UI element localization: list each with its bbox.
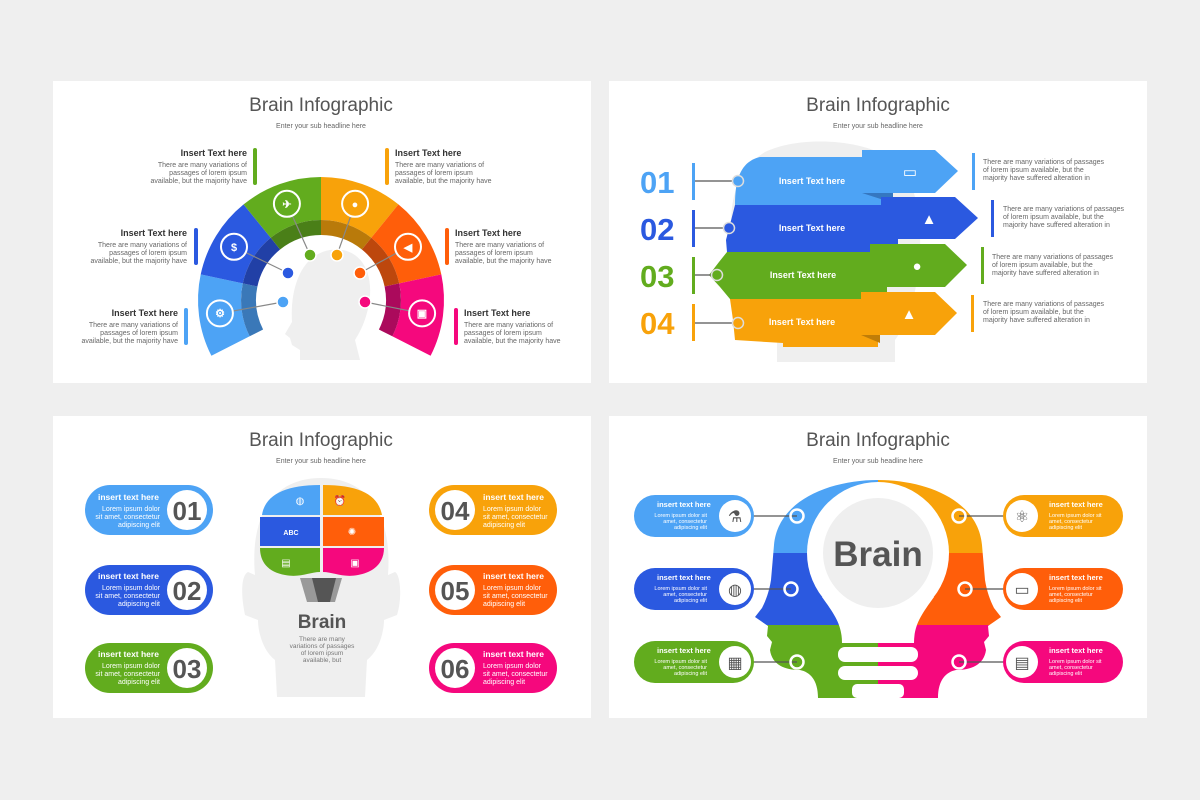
pills: insert text here — [483, 571, 544, 581]
right texts: majority have suffered alteration in — [1003, 222, 1110, 229]
numbers — [640, 165, 675, 341]
right texts: There are many variations of passages — [992, 254, 1114, 261]
pills — [634, 495, 1123, 683]
pills: ⚛ — [1015, 509, 1029, 526]
text blocks: passages of lorem ipsum — [464, 330, 542, 337]
right texts: There are many variations of passages — [983, 301, 1105, 308]
brain: ◍ — [296, 496, 305, 507]
pills: adipiscing elit — [674, 598, 707, 604]
brain label: Brain — [833, 535, 923, 574]
pills: insert text here — [483, 492, 544, 502]
pills: amet, consectetur — [1049, 592, 1093, 598]
pills: Lorem ipsum dolor — [483, 663, 542, 670]
pills: 01 — [173, 496, 201, 526]
brain description: There are many — [299, 636, 346, 643]
band labels: Insert Text here — [769, 317, 835, 327]
panel: head bands — [609, 81, 1147, 383]
right head — [878, 480, 1001, 698]
pills: Lorem ipsum dolor — [102, 663, 161, 670]
text blocks: Insert Text here — [181, 148, 247, 158]
pills: sit amet, consectetur — [483, 593, 548, 600]
pills: 05 — [441, 576, 469, 606]
right texts: of lorem ipsum available, but the — [983, 309, 1084, 316]
text blocks — [82, 148, 561, 345]
arrow tags — [861, 150, 978, 343]
pills: Lorem ipsum dolor sit — [1049, 586, 1102, 592]
pills: insert text here — [1049, 500, 1103, 509]
pills: amet, consectetur — [663, 592, 707, 598]
panel: brain grid — [53, 416, 591, 718]
pills: adipiscing elit — [674, 671, 707, 677]
connectors — [692, 163, 744, 341]
pills: Lorem ipsum dolor sit — [654, 586, 707, 592]
head silhouette — [720, 141, 920, 362]
numbers: 03 — [640, 259, 674, 294]
text blocks: There are many variations of — [98, 242, 187, 249]
icon circles — [207, 191, 435, 326]
pills: insert text here — [98, 492, 159, 502]
icon glyphs: ● — [352, 199, 358, 211]
pills: amet, consectetur — [663, 519, 707, 525]
pills: sit amet, consectetur — [95, 593, 161, 600]
pills: insert text here — [483, 649, 544, 659]
text blocks: Insert Text here — [121, 228, 187, 238]
tag icons: ▭ — [903, 164, 917, 181]
text blocks: Insert Text here — [455, 228, 521, 238]
right texts: majority have suffered alteration in — [992, 270, 1099, 277]
rings — [784, 510, 972, 668]
title: Brain Infographic — [249, 95, 393, 116]
pills: adipiscing elit — [118, 679, 160, 686]
pills: insert text here — [657, 646, 711, 655]
band labels: Insert Text here — [779, 176, 845, 186]
pills: Lorem ipsum dolor — [483, 585, 542, 592]
subtitle: Enter your sub headline here — [833, 458, 923, 465]
title: Brain Infographic — [806, 430, 950, 451]
text blocks: passages of lorem ipsum — [169, 170, 247, 177]
text blocks: passages of lorem ipsum — [100, 330, 178, 337]
band labels: Insert Text here — [770, 270, 836, 280]
pills: 06 — [441, 654, 469, 684]
pills: adipiscing elit — [483, 522, 525, 529]
pills: ▦ — [727, 655, 743, 672]
pills: adipiscing elit — [674, 525, 707, 531]
pills: adipiscing elit — [483, 679, 525, 686]
right texts: There are many variations of passages — [983, 159, 1105, 166]
right texts: There are many variations of passages — [1003, 206, 1125, 213]
pills: Lorem ipsum dolor — [102, 506, 161, 513]
bands — [709, 157, 898, 347]
panel: two heads lightbulb — [609, 416, 1147, 718]
pills: 04 — [441, 496, 470, 526]
title: Brain Infographic — [806, 95, 950, 116]
head silhouette — [242, 478, 400, 697]
pills: amet, consectetur — [663, 665, 707, 671]
icon glyphs: ⚙ — [215, 308, 225, 320]
dots — [277, 249, 371, 308]
pills: Lorem ipsum dolor sit — [1049, 659, 1102, 665]
pills: sit amet, consectetur — [483, 671, 548, 678]
brain: ▤ — [281, 558, 291, 569]
lightbulb — [807, 482, 949, 698]
subtitle: Enter your sub headline here — [276, 123, 366, 130]
right texts: of lorem ipsum available, but the — [992, 262, 1093, 269]
right texts: majority have suffered alteration in — [983, 175, 1090, 182]
pills: ▤ — [1014, 655, 1030, 672]
pills: ⚗ — [728, 509, 742, 526]
brain — [260, 485, 384, 602]
right texts — [971, 153, 1125, 332]
icon glyphs: ◀ — [403, 242, 413, 254]
pills: sit amet, consectetur — [95, 514, 161, 521]
text blocks: available, but the majority have — [455, 258, 552, 265]
icon glyphs: $ — [231, 242, 237, 254]
pills: adipiscing elit — [1049, 525, 1082, 531]
text blocks: There are many variations of — [158, 162, 247, 169]
pills: insert text here — [98, 571, 159, 581]
pills: adipiscing elit — [118, 601, 160, 608]
right texts: of lorem ipsum available, but the — [1003, 214, 1104, 221]
numbers: 01 — [640, 165, 674, 200]
pills: insert text here — [1049, 573, 1103, 582]
pills: insert text here — [657, 573, 711, 582]
text blocks: Insert Text here — [464, 308, 530, 318]
pills: amet, consectetur — [1049, 665, 1093, 671]
numbers: 02 — [640, 212, 674, 247]
right texts: majority have suffered alteration in — [983, 317, 1090, 324]
icon glyphs — [215, 199, 427, 320]
brain description: available, but — [303, 657, 341, 664]
pills: 03 — [173, 654, 201, 684]
icon glyphs: ✈ — [282, 199, 292, 211]
pills: amet, consectetur — [1049, 519, 1093, 525]
panel: semicircle brain — [53, 81, 591, 383]
pills: adipiscing elit — [1049, 598, 1082, 604]
brain description — [290, 636, 355, 664]
pills: ▭ — [1014, 582, 1030, 599]
brain: ✺ — [348, 527, 356, 538]
pills — [85, 485, 557, 693]
text blocks: Insert Text here — [395, 148, 461, 158]
pills: Lorem ipsum dolor sit — [654, 659, 707, 665]
brain description: of lorem ipsum — [301, 650, 343, 657]
text blocks: available, but the majority have — [395, 178, 492, 185]
title: Brain Infographic — [249, 430, 393, 451]
connectors — [735, 516, 1022, 662]
pills: sit amet, consectetur — [95, 671, 161, 678]
brain description: variations of passages — [290, 643, 355, 650]
text blocks: There are many variations of — [464, 322, 553, 329]
subtitle: Enter your sub headline here — [276, 458, 366, 465]
text blocks: passages of lorem ipsum — [109, 250, 187, 257]
pills: Lorem ipsum dolor — [483, 506, 542, 513]
brain: ▣ — [350, 558, 360, 569]
pills: sit amet, consectetur — [483, 514, 548, 521]
text blocks: passages of lorem ipsum — [395, 170, 473, 177]
pills: 02 — [173, 576, 201, 606]
arc segments — [198, 177, 444, 356]
right texts: of lorem ipsum available, but the — [983, 167, 1084, 174]
pills: Lorem ipsum dolor sit — [654, 513, 707, 519]
pills: ◍ — [728, 582, 742, 599]
connector lines — [220, 204, 422, 313]
text blocks: Insert Text here — [112, 308, 178, 318]
brain label: Brain — [298, 612, 346, 633]
pills: insert text here — [98, 649, 159, 659]
pills: Lorem ipsum dolor sit — [1049, 513, 1102, 519]
text blocks: available, but the majority have — [82, 338, 178, 345]
pills: adipiscing elit — [118, 522, 160, 529]
tag icons: ▲ — [902, 306, 916, 323]
text blocks: available, but the majority have — [150, 178, 247, 185]
icon glyphs: ▣ — [417, 308, 427, 320]
pills: adipiscing elit — [1049, 671, 1082, 677]
left head — [755, 480, 878, 698]
pills: insert text here — [657, 500, 711, 509]
tag icons — [902, 164, 936, 323]
tag icons: ▲ — [922, 211, 936, 228]
text blocks: There are many variations of — [89, 322, 178, 329]
pills: Lorem ipsum dolor — [102, 585, 161, 592]
text blocks: There are many variations of — [455, 242, 544, 249]
text blocks: passages of lorem ipsum — [455, 250, 533, 257]
subtitle: Enter your sub headline here — [833, 123, 923, 130]
tag icons: ● — [912, 258, 922, 275]
band labels: Insert Text here — [779, 223, 845, 233]
head silhouette — [285, 249, 370, 360]
brain: ⏰ — [334, 494, 346, 507]
brain: ABC — [283, 530, 299, 537]
pills: insert text here — [1049, 646, 1103, 655]
text blocks: available, but the majority have — [464, 338, 561, 345]
text blocks: available, but the majority have — [90, 258, 187, 265]
pills: adipiscing elit — [483, 601, 525, 608]
band labels — [769, 176, 845, 327]
text blocks: There are many variations of — [395, 162, 484, 169]
numbers: 04 — [640, 306, 675, 341]
